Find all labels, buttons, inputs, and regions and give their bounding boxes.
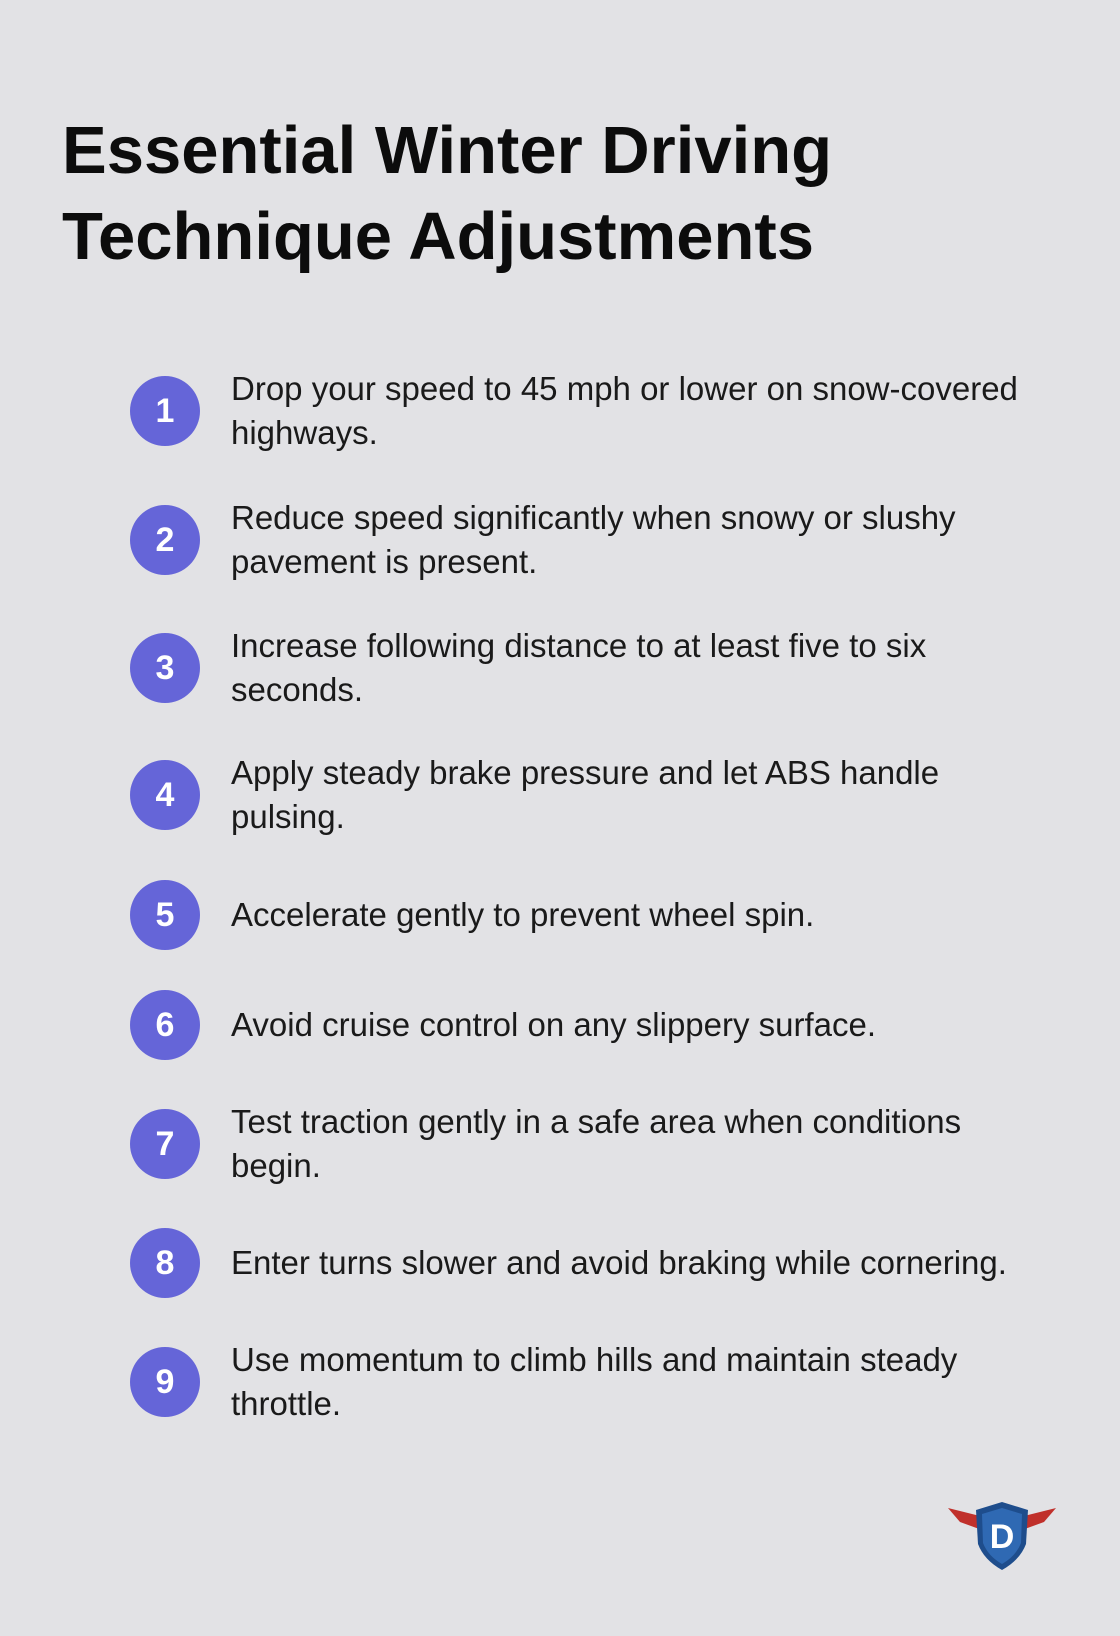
icon: logo shield with wings: D: [990, 1518, 1014, 1556]
item 5: [130, 880, 814, 950]
title: Technique Adjustments: [62, 199, 814, 274]
item 3: [130, 627, 926, 708]
item 9: throttle.: [231, 1385, 341, 1422]
title: Essential Winter Driving: [62, 113, 832, 188]
item 1: 1: [156, 392, 174, 430]
item 4: pulsing.: [231, 798, 345, 835]
item 1: Drop your speed to 45 mph or lower on snow-covered: [231, 370, 1018, 407]
item 8: 8: [156, 1244, 174, 1282]
item 4: 4: [156, 776, 174, 814]
item 3: 3: [156, 649, 174, 687]
item 7: 7: [156, 1125, 174, 1163]
item 3: seconds.: [231, 671, 363, 708]
item 9: Use momentum to climb hills and maintain steady: [231, 1341, 957, 1378]
item 6: Avoid cruise control on any slippery surface.: [231, 1006, 876, 1043]
title: [62, 113, 832, 274]
item 7: begin.: [231, 1147, 321, 1184]
item 4: Apply steady brake pressure and let ABS handle: [231, 754, 939, 791]
item 6: 6: [156, 1006, 174, 1044]
item 2: pavement is present.: [231, 543, 537, 580]
item 1: [130, 370, 1018, 451]
item 9: 9: [156, 1363, 174, 1401]
item 5: Accelerate gently to prevent wheel spin.: [231, 896, 814, 933]
item 8: [130, 1228, 1007, 1298]
item 9: [130, 1341, 958, 1422]
icon: logo shield with wings: [948, 1502, 1056, 1570]
item 7: Test traction gently in a safe area when conditions: [231, 1103, 961, 1140]
item 6: [130, 990, 876, 1060]
item 1: highways.: [231, 414, 378, 451]
item 2: 2: [156, 521, 174, 559]
item 2: [130, 499, 956, 580]
item 2: Reduce speed significantly when snowy or slushy: [231, 499, 956, 536]
item 8: Enter turns slower and avoid braking while cornering.: [231, 1244, 1007, 1281]
item 5: 5: [156, 896, 174, 934]
item 4: [130, 754, 939, 835]
item 7: [130, 1103, 961, 1184]
item 3: Increase following distance to at least five to six: [231, 627, 926, 664]
